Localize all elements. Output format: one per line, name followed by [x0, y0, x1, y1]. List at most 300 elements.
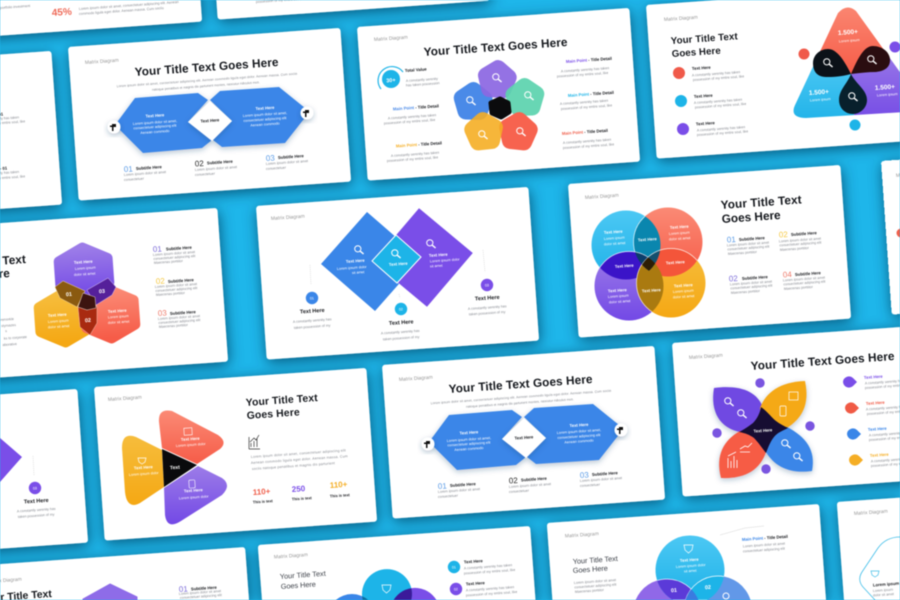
segment values: 1.500+ [809, 89, 829, 97]
stat 110+ red [253, 487, 274, 504]
list item 02: Text Here [466, 580, 486, 586]
petal: green [512, 83, 540, 112]
callout 03: A constantly serenity has [468, 304, 507, 311]
drop: bottom [839, 74, 867, 114]
callout 02: A constantly serenity has [381, 329, 420, 335]
list item 03: Subtitle Here [592, 470, 619, 477]
stat 250 purple: 250 [292, 484, 306, 494]
icon: bar chart [249, 435, 260, 449]
panel: hexagon pair slide (second) [399, 372, 628, 499]
shape text: dolor sit amet [873, 592, 894, 597]
yellow petal text: Lorem ipsum dolor [129, 471, 160, 477]
title: Your Title Text [573, 554, 618, 566]
icon: right badge [300, 106, 314, 120]
total value text [405, 66, 440, 87]
body text fragment: remorkle [0, 317, 14, 322]
yellow petal text: Text Here [134, 464, 154, 470]
slide label: Matrix Diagram [271, 214, 305, 222]
list item 04 [783, 270, 826, 291]
gauge: total value: 30+ [386, 78, 396, 84]
list item 01: Lorem ipsum dolor sit amet [124, 170, 166, 177]
total value text: has taken possession [406, 81, 440, 87]
list item 01: consectetuer adipiscing elit [727, 245, 770, 251]
panel: right edge fragment [896, 172, 900, 238]
region labels: Lorem ipsum dolor [676, 563, 707, 569]
petal: red [503, 118, 534, 148]
list item 01: Subtitle Here [450, 481, 477, 488]
lens: cyan and purple [599, 250, 648, 280]
overlap 02 [78, 306, 97, 335]
list item 01: 01 [124, 164, 134, 174]
list item 01 [438, 481, 480, 499]
center diamond [188, 101, 232, 141]
red petal text [176, 428, 207, 448]
list item cyan [675, 93, 746, 109]
region labels: Lorem ipsum [669, 231, 690, 236]
circle: purple [394, 588, 436, 600]
list item 02 [195, 159, 237, 177]
list item purple [677, 120, 748, 137]
callout: yellow point [387, 140, 442, 163]
gauge: total value [378, 67, 403, 89]
triple overlaps [634, 250, 661, 271]
list item 02: possession of my entire soul, like [466, 590, 517, 597]
center diamond [502, 418, 546, 458]
title [573, 554, 618, 575]
list item 04: Maecenas porttitor [784, 285, 814, 291]
title: Your Title Text Goes Here [134, 55, 279, 79]
list item 03: Lorem ipsum dolor sit amet [266, 159, 308, 166]
list item red [673, 65, 744, 82]
leaf icons [725, 392, 803, 468]
leaf: yellow [760, 381, 806, 430]
overlaps [362, 588, 413, 600]
body text [251, 448, 348, 471]
list item 03: Subtitle Here [170, 309, 197, 316]
triangle chart [792, 6, 900, 132]
list item 02 purple: consectetuer adipiscing elit [730, 284, 773, 290]
list item 02: Subtitle Here [521, 476, 548, 482]
slide label: Matrix Diagram [689, 353, 723, 361]
body text: Lorem ipsum dolor sit amet, consectetuer adipiscing elit [251, 448, 346, 459]
panel: bottom venn slide with list [274, 552, 517, 600]
segment values: 1.500+ [838, 29, 858, 37]
hex labels: dolor sit amet [74, 272, 96, 277]
body text fragment: ks to corporate [4, 335, 27, 341]
callout 02 [381, 303, 420, 341]
region labels: Text Here [642, 287, 662, 293]
list item 01: 01 [153, 244, 163, 254]
stat description: portfolio investment [0, 4, 30, 10]
region labels: Text Here [680, 557, 699, 563]
center diamond text [389, 250, 408, 267]
right hexagon [524, 404, 621, 464]
segments [792, 6, 900, 119]
stat 110+ yellow [330, 480, 351, 498]
intro text: natoque penatibus et magnis dis parturient montes, nascetur ridiculus mus. [466, 397, 574, 409]
region labels: Text Here [608, 287, 628, 293]
stat 110+ red: 110+ [253, 487, 271, 497]
diamond: purple [373, 208, 473, 307]
callout: Main Point - Title Detail [742, 534, 788, 542]
stat description: Lorem ipsum dolor sit amet, consectetuer adipiscing elit. Aenean [79, 0, 179, 11]
panel: hexagon pair slide [85, 55, 314, 182]
list item 04: Subtitle Here [795, 270, 822, 277]
list item 02 yellow: 02 [779, 230, 789, 239]
region labels: Text Here [638, 236, 658, 242]
left hexagon text: Lorem ipsum dolor sit amet, [447, 436, 491, 443]
left hexagon text: Text Here [459, 429, 479, 436]
list item cyan: A constantly serenity has taken [694, 98, 742, 105]
hex labels: Lorem ipsum [75, 266, 96, 271]
body text: Maecenas porttitor [575, 588, 605, 594]
list item 01: consectetuer adipiscing elit [153, 254, 196, 261]
stat description [0, 0, 179, 16]
drop icons [824, 56, 877, 101]
hex: yellow [38, 292, 90, 344]
diamond fragment [0, 438, 22, 482]
list item 01 [153, 244, 196, 265]
red petal text: Lorem ipsum dolor [176, 442, 207, 448]
list item 02: 02 [509, 476, 519, 485]
callout 02: Text Here [389, 319, 414, 327]
overlap 02: 02 [85, 318, 91, 324]
list item 01: Lorem ipsum dolor sit amet [179, 589, 221, 596]
callout 01: taken possession of my [294, 323, 331, 330]
icon: cyan circle [382, 585, 391, 593]
callout fragments [0, 111, 25, 182]
slide label: Matrix Diagram [664, 15, 698, 23]
left hexagon [115, 93, 212, 153]
region labels [604, 224, 695, 304]
panel: bottom right fragment [854, 509, 900, 600]
list item 02: Lorem ipsum dolor sit amet [155, 282, 197, 289]
title: Goes Here [281, 580, 316, 591]
title: Your Title Text [670, 31, 739, 47]
list item 02: 02 [156, 276, 166, 286]
petal: blue [458, 87, 486, 116]
right hexagon [210, 87, 307, 147]
callout: yellow point: Main Point - Title Detail [396, 140, 442, 148]
callout: cyan point: possession of my entire soul, like [561, 103, 612, 111]
left hexagon text: Lorem ipsum dolor sit amet, [133, 119, 177, 126]
callout 01: A constantly serenity has [293, 317, 332, 324]
body text fragment: s [5, 329, 7, 333]
list item 02 [509, 476, 551, 494]
list item 02: consectetuer [509, 489, 530, 494]
slide label: Matrix Diagram [374, 35, 408, 43]
list item 02 purple: Lorem ipsum dolor sit amet [730, 280, 772, 286]
list item cyan: possession of my entire soul, like [695, 102, 746, 109]
list item yellow [849, 452, 900, 468]
overlap 01 [55, 281, 85, 307]
list item 03 [580, 470, 622, 488]
left hexagon text [447, 429, 491, 452]
list item purple: possession of my entire soul, like [697, 129, 748, 137]
list item 02 purple: Maecenas porttitor [731, 289, 761, 295]
list item 03: Lorem ipsum dolor sit amet [158, 314, 200, 321]
list item 01: Text Here [464, 558, 484, 564]
region labels: dolor sit amet [609, 299, 631, 304]
stat 250 purple: This is text [292, 496, 313, 501]
list item 04: consectetuer adipiscing elit [783, 280, 826, 286]
region labels: Text Here [670, 224, 689, 230]
list item purple: A constantly serenity has taken [697, 125, 745, 132]
callout 03: A constantly serenity has [17, 507, 56, 513]
flower center [491, 99, 509, 117]
callout: blue point: Main Point - Title Detail [393, 103, 439, 111]
venn chart [636, 535, 750, 600]
list item 03: consectetuer [580, 483, 601, 488]
hex labels: Lorem ipsum [48, 319, 69, 324]
list item 01: Maecenas porttitor [154, 259, 184, 265]
slide label: Matrix Diagram [108, 395, 142, 403]
list item 01: Subtitle Here [136, 164, 163, 171]
list item 04: Lorem ipsum dolor sit amet [783, 276, 825, 282]
list item 03: consectetuer adipiscing elit [158, 318, 201, 325]
purple petal text [179, 480, 210, 500]
callout: cyan point [560, 90, 614, 111]
center diamond: Text Here [514, 434, 534, 441]
region labels: Text Here [674, 282, 694, 288]
stat 110+ yellow: This is text [330, 493, 351, 498]
list item 02: 02 [454, 587, 458, 592]
list item red: Text Here [866, 400, 885, 406]
right hexagon text: Text Here [255, 105, 275, 111]
center diamond text: Text Here [389, 261, 408, 267]
stat 110+ red: This is text [253, 499, 274, 504]
outer badges [712, 378, 815, 474]
body text: Aenean commodo ligula eget dolor. Aenean massa. Cum [251, 454, 348, 465]
callout 03 [17, 482, 56, 519]
title [280, 569, 326, 591]
list item red: possession of my entire soul, like [693, 74, 744, 82]
list item blue: Text Here [868, 426, 887, 432]
left hexagon text: Aenean commodo [140, 129, 170, 135]
title: Goes Here [721, 208, 782, 226]
shape text [871, 571, 900, 597]
drop: right [851, 46, 890, 74]
circle: cyan [592, 210, 660, 280]
slide label: Matrix Diagram [565, 531, 599, 539]
list item 01: Subtitle Here [191, 585, 218, 591]
panel: bottom venn slide with callout [565, 526, 788, 600]
callout: red point [562, 128, 614, 150]
icon: left badge [108, 120, 120, 134]
purple diamond text: sit amet [430, 264, 443, 268]
list item 02: A constantly serenity has taken [466, 585, 514, 592]
list item 03 [158, 308, 201, 329]
list item 03: Maecenas porttitor [159, 323, 189, 329]
list item 01 [727, 235, 770, 256]
diamond: cyan center [372, 235, 421, 283]
list item 01 [179, 584, 222, 600]
list item 01: A constantly serenity has taken [464, 563, 512, 570]
panel: triangle slide [664, 0, 900, 137]
list item 02 purple: Subtitle Here [742, 274, 769, 281]
callout 01 [293, 292, 332, 330]
callout: purple point: A constantly serenity has taken [561, 66, 609, 73]
body text fragment [0, 317, 27, 347]
title [720, 192, 802, 226]
title [245, 393, 319, 422]
list item 01: 01 [179, 584, 189, 594]
callout 03: Text Here [24, 498, 49, 505]
callout: blue point: A constantly serenity has taken [388, 113, 436, 120]
petal: purple [164, 466, 227, 524]
callout: red point: Main Point - Title Detail [562, 128, 608, 136]
center diamond: Text Here [200, 117, 220, 124]
region labels: dolor sit amet [669, 236, 691, 241]
list item 01: 01 [727, 235, 737, 244]
panel: left edge fragment [0, 111, 25, 182]
callout 03: Text Here [475, 295, 500, 302]
callout: purple point: Main Point - Title Detail [566, 56, 612, 64]
title: Goes Here [246, 407, 300, 422]
purple diamond text: Text Here [429, 252, 448, 258]
blue diamond text [337, 246, 368, 275]
callout 02: 02 [399, 307, 403, 312]
venn chart [336, 569, 436, 600]
panel: flower slide [374, 35, 614, 163]
body text fragment: stymazes [1, 323, 16, 328]
title [670, 31, 739, 60]
shape text: Lorem ipsum [873, 581, 900, 587]
leaf: purple [713, 387, 764, 432]
callout: blue point: possession of my entire soul, like [384, 118, 435, 125]
hex labels: Text Here [48, 312, 67, 318]
right hexagon text: Aenean commodo [250, 121, 280, 128]
list item 02 yellow: Lorem ipsum dolor sit amet [779, 237, 821, 243]
leaf: blue [764, 427, 813, 472]
connector lines [310, 250, 485, 298]
shape text: Lorem ipsum [873, 588, 893, 593]
slide label: Matrix Diagram [274, 552, 308, 560]
list item 04: 04 [783, 270, 793, 279]
right hexagon text: Lorem ipsum dolor sit amet, [557, 428, 601, 435]
list item purple: Text Here [696, 120, 716, 126]
circle: red [634, 208, 702, 276]
circle: blue [336, 594, 368, 600]
stat description: commodo ligula eget dolor. Aenean massa. Cum sociis [79, 6, 164, 16]
callout 01: 01 [310, 296, 314, 301]
intro text: natoque penatibus et magnis dis parturient montes, nascetur ridiculus mus. [152, 80, 260, 92]
list item 01: consectetuer [124, 177, 145, 182]
center triangle [162, 449, 197, 487]
right hexagon text [557, 422, 601, 445]
slide label: Matrix Diagram [85, 58, 119, 66]
body text fragment: aborative [2, 342, 17, 347]
list item red: A constantly serenity has taken [692, 70, 740, 77]
list item 03 [266, 153, 308, 171]
yellow petal text [129, 458, 160, 477]
blue diamond text: sit amet [352, 270, 365, 275]
right hexagon text: Text Here [569, 422, 589, 428]
left hexagon text: consectetuer adipiscing elit [133, 124, 177, 131]
callout: purple point: possession of my entire soul, like [557, 71, 608, 78]
purple hexagon top [83, 584, 137, 600]
purple diamond text: Lorem ipsum dolor [430, 257, 461, 263]
icon: right badge [614, 424, 628, 436]
list item 02 purple: 02 [729, 274, 739, 283]
panel: left diamond fragment [0, 438, 56, 519]
callout: purple point [557, 56, 612, 78]
circle: yellow [636, 248, 706, 318]
callout 03: 03 [485, 283, 489, 288]
panel: bottom left fragment [0, 577, 222, 600]
list item 01: consectetuer [438, 494, 459, 499]
hex labels: dolor sit amet [108, 320, 130, 325]
list item 03: 03 [266, 153, 276, 163]
list item 02 yellow: consectetuer adipiscing elit [779, 241, 822, 247]
list item cyan: Text Here [694, 93, 713, 99]
intro text: Lorem ipsum dolor sit amet, consectetuer adipiscing elit. Aenean commodo ligula eget dolor. Aenean massa. Cum sociis [431, 389, 612, 405]
overlap center [78, 293, 96, 310]
list item 02: 02 [195, 159, 205, 168]
list item 03: consectetuer [266, 166, 287, 171]
list item 02: Subtitle Here [168, 277, 195, 284]
blue diamond text: Text Here [346, 258, 365, 264]
title: Your Title Text Goes Here [423, 35, 568, 59]
center overlap [642, 257, 656, 271]
title fragment [0, 252, 26, 284]
list item purple: Text Here [864, 374, 883, 380]
slide label: Matrix Diagram [854, 509, 888, 517]
overlap 01: 01 [66, 292, 72, 298]
leaf chart [713, 381, 813, 478]
region labels: 01 [671, 588, 677, 594]
segment values: Lorem ipsum [877, 92, 898, 97]
callout: blue point [384, 103, 439, 125]
list item yellow: Text Here [870, 452, 889, 458]
list item blue [847, 426, 900, 442]
segment values: Lorem ipsum [839, 38, 860, 43]
title: Your Title Text [245, 393, 319, 409]
list item 02: Lorem ipsum dolor sit amet [509, 482, 551, 489]
circle: purple [594, 252, 664, 320]
callout: yellow point: A constantly serenity has taken [391, 151, 439, 158]
panel: four circle venn slide [585, 192, 826, 320]
petal: purple [485, 67, 509, 91]
drop: left [813, 49, 851, 77]
panel: hexagon venn slide [0, 244, 201, 347]
callout 01: Text Here [300, 308, 325, 315]
left hexagon text: Text Here [145, 112, 165, 119]
region labels: Text Here [615, 263, 634, 269]
callout: Lorem ipsum dolor sit amet [743, 542, 785, 548]
circle: purple [636, 579, 698, 600]
outer badges [798, 42, 900, 130]
list item red: Text Here [692, 65, 711, 71]
hex: red [84, 288, 136, 340]
purple petal text: Text Here [184, 487, 204, 493]
callout [720, 526, 788, 553]
lens: cyan and red [632, 216, 662, 258]
callout: red point: A constantly serenity has taken [563, 138, 611, 145]
left hexagon text: consectetuer adipiscing elit [447, 441, 491, 448]
hex labels: Text Here [74, 259, 93, 265]
overlap 03: 03 [99, 289, 105, 295]
body text [574, 578, 617, 594]
center star: Text Here [753, 427, 773, 434]
leaf: red [719, 430, 766, 478]
region labels: sit amet [684, 569, 697, 573]
intro text: Lorem ipsum dolor sit amet, consectetuer adipiscing elit. Aenean commodo ligula eget dolor. Aenean massa. Cum sociis [117, 72, 298, 88]
region labels: Lorem ipsum [673, 289, 694, 294]
circle: blue [686, 576, 750, 600]
rounded outline shape [860, 537, 900, 600]
list item 02 [155, 276, 198, 297]
